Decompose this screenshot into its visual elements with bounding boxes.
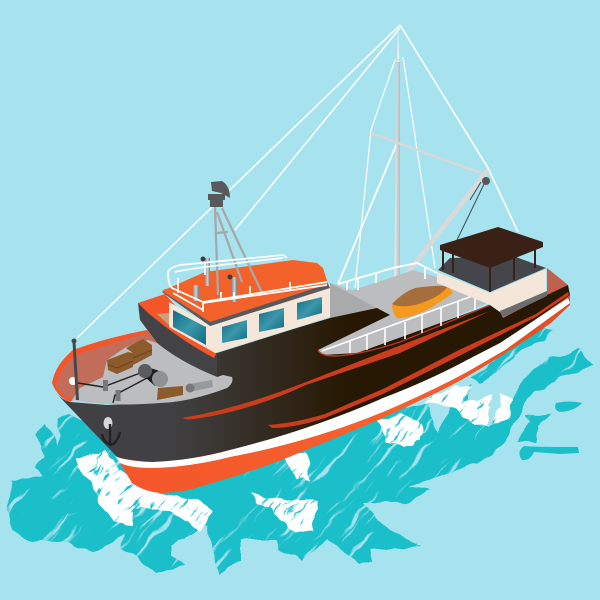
water blobs [519,402,582,460]
cabin posts [443,248,535,292]
roof railing [168,255,327,312]
cabin dark floor [438,256,546,292]
forward lower superstructure [138,294,217,377]
cross spar [371,133,483,174]
front windows [222,320,247,343]
bow bulwark orange [52,330,157,402]
radar tripod [215,207,263,295]
hull black body [55,285,570,463]
wheelhouse roof edge [162,284,330,326]
bow deck and bulwark [52,330,232,404]
cargo boom [402,170,490,280]
stern rear deck panel [500,268,568,318]
rear deck railing [338,263,437,290]
side deck railing [322,295,475,353]
anchor [102,417,120,445]
wheelhouse [162,260,330,353]
white foam patches [78,385,513,533]
wheelhouse walls [169,285,330,353]
radar head [208,181,230,207]
rigging wires [77,25,518,338]
winch and bollards [78,364,168,403]
roof lamps [193,256,237,302]
bow deck grey [72,340,232,404]
cabin roof [440,227,543,268]
bow post [72,338,79,400]
rowboat [392,286,453,318]
wheelhouse roof [162,260,328,322]
hull white stripe [115,298,570,468]
cabin cream walls [437,269,546,312]
bow bulwark inner [56,333,157,400]
side deck red edge [318,305,490,356]
stern cabin [437,227,547,317]
bow cylinder [186,380,213,392]
hull red accent stripes [182,292,569,428]
side window [173,310,206,345]
stern grey ledge [500,291,547,317]
crates on bow [107,339,152,374]
hull orange underside [117,295,570,493]
rear side grey wall [330,283,363,318]
main mast [394,27,404,300]
main deck [318,270,487,356]
bow crate [157,386,183,400]
water splash [7,327,592,577]
